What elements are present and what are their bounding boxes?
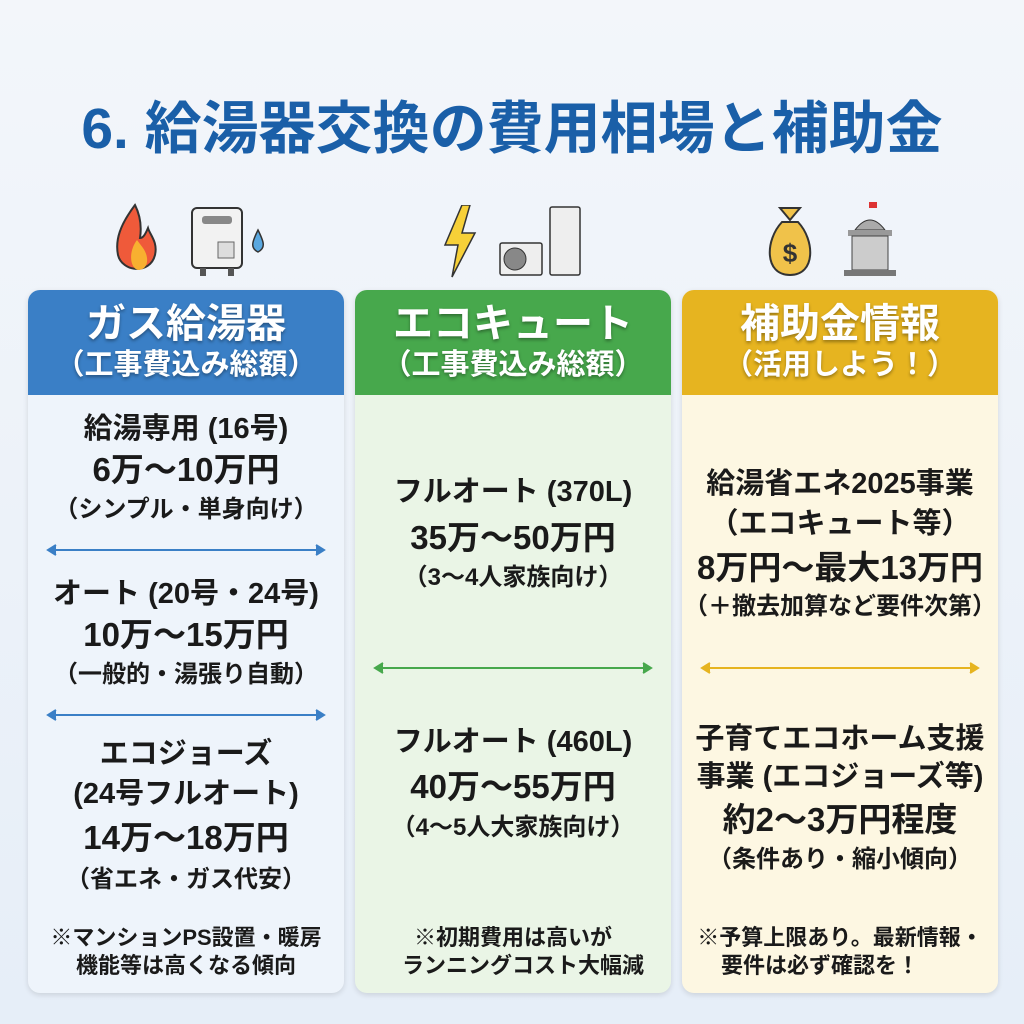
header: eco cute xyxy=(355,290,671,395)
text: auto: 10万～15万円 xyxy=(83,616,289,653)
text: 2025 program xyxy=(684,468,996,620)
text: 460L: 40万～55万円 xyxy=(410,768,616,805)
panel: eco cute xyxy=(355,290,671,993)
text: 460L: フルオート (460L) xyxy=(394,726,632,758)
text: kosodate program: 事業 (エコジョーズ等) xyxy=(697,761,983,793)
header: subsidies: （活用しよう！） xyxy=(724,349,956,381)
note: ※マンションPS設置・暖房 xyxy=(50,925,322,950)
header: subsidies xyxy=(682,290,998,395)
arrow xyxy=(46,544,326,556)
text: eco-jozu: 14万～18万円 xyxy=(83,819,289,856)
arrow xyxy=(46,709,326,721)
note: 要件は必ず確認を！ xyxy=(721,953,919,978)
note xyxy=(697,925,983,978)
text: auto: （一般的・湯張り自動） xyxy=(54,661,318,688)
panel: gas water heater xyxy=(28,290,344,993)
header: eco cute: （工事費込み総額） xyxy=(382,349,644,381)
arrow xyxy=(700,662,980,674)
note: 機能等は高くなる傾向 xyxy=(76,953,296,978)
text: auto: オート (20号・24号) xyxy=(53,578,319,610)
text: kosodate program: 子育てエコホーム支援 xyxy=(695,723,985,755)
text: auto xyxy=(53,578,319,688)
title: 6. 給湯器交換の費用相場と補助金 xyxy=(81,97,943,161)
header: eco cute: エコキュート xyxy=(393,302,633,346)
text: kosodate program: （条件あり・縮小傾向） xyxy=(708,846,972,873)
text: eco-jozu: エコジョーズ xyxy=(100,738,272,770)
note xyxy=(402,925,644,978)
text: 16号: 6万～10万円 xyxy=(92,451,280,488)
text: kosodate program xyxy=(695,723,985,873)
text: kosodate program: 約2～3万円程度 xyxy=(723,801,957,838)
text: eco-jozu: (24号フルオート) xyxy=(73,778,299,810)
header: subsidies: 補助金情報 xyxy=(740,302,940,346)
text: 370L xyxy=(394,476,632,591)
icon: gas fire, heater, water drop xyxy=(116,203,264,276)
text: 2025 program: 給湯省エネ2025事業 xyxy=(706,468,974,500)
text: 460L xyxy=(392,726,634,841)
icon: money bag and government building xyxy=(768,202,896,276)
header: gas: ガス給湯器 xyxy=(86,302,286,346)
note: ※予算上限あり。最新情報・ xyxy=(697,925,983,950)
text: eco-jozu xyxy=(66,738,306,893)
icon: lightning and heat pump xyxy=(444,205,581,278)
header: gas xyxy=(28,290,344,395)
text: 460L: （4～5人大家族向け） xyxy=(392,814,634,841)
note xyxy=(50,925,322,978)
text: eco-jozu: （省エネ・ガス代安） xyxy=(66,866,306,893)
text: 2025 program: （エコキュート等） xyxy=(709,508,970,540)
note: ※初期費用は高いが xyxy=(414,925,612,950)
text: 16号 xyxy=(54,413,318,523)
text: 370L: （3～4人家族向け） xyxy=(404,564,622,591)
arrow xyxy=(373,662,653,674)
icon: money bag and government building: $ xyxy=(783,238,798,268)
panel: subsidies xyxy=(682,290,998,993)
text: 2025 program: （＋撤去加算など要件次第） xyxy=(684,593,996,620)
text: 370L: フルオート (370L) xyxy=(394,476,632,508)
text: 2025 program: 8万円～最大13万円 xyxy=(697,549,983,586)
note: ランニングコスト大幅減 xyxy=(402,953,644,978)
text: 370L: 35万～50万円 xyxy=(410,519,616,556)
header: gas: （工事費込み総額） xyxy=(55,349,316,381)
text: 16号: （シンプル・単身向け） xyxy=(54,496,318,523)
text: 16号: 給湯専用 (16号) xyxy=(84,413,288,445)
